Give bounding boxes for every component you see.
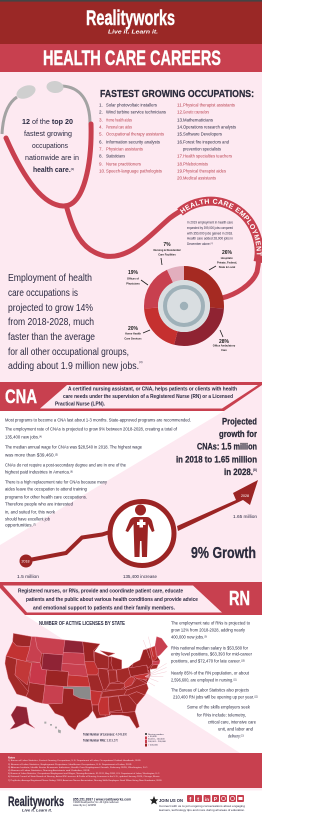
text block: CNA facts: CNAs do not require a post-secondary degree and are in one of the: [5, 462, 126, 468]
icon: star: [150, 796, 158, 804]
icons: social media: f: [189, 797, 191, 803]
list: occupations 11 to 20: Medical assistants: [183, 176, 217, 180]
text block: 12 of the top 20: 12 of the top 20: [22, 117, 73, 126]
text block: 2019 employment: (2): [211, 243, 213, 245]
logo: footer: Live it. Learn it.: [22, 808, 52, 812]
panel: notes: 5) Bureau of Labor Statistics, Occupational Employment and Wages, Nursing Assistants, 31-1131, May 2018, U.S. Department of Labor, Washington, D.C.: [8, 772, 160, 775]
list: occupations 11 to 20: 15.: [177, 132, 183, 136]
text block: CNA definition: A certified nursing assistant, or CNA, helps patients or clients with health: [68, 386, 237, 392]
legend: licenses: 100,001 - 200,000: [148, 741, 167, 743]
list: occupations 11 to 20: 12.: [177, 110, 183, 114]
legend: licenses: [145, 733, 167, 746]
list: occupations 11 to 20: Forest fire inspectors and: [183, 140, 229, 144]
icons: social media: t: [197, 797, 199, 803]
list: occupations 1 to 10: Information security analysts: [106, 140, 161, 144]
list: occupations 11 to 20: 13.: [177, 118, 183, 122]
text block: RN facts: delivery.: [228, 734, 245, 738]
logo: footer: Realityworks: [8, 793, 64, 809]
list: occupations 1 to 10: Statisticians: [106, 154, 126, 158]
list: occupations 1 to 10: Personal care aides: [106, 124, 132, 130]
list: occupations 11 to 20: Genetic counselors: [183, 110, 209, 114]
text block: CNA facts: aides leave the occupation to attend training: [5, 486, 87, 492]
chart label: 26% hospitals: [209, 250, 237, 270]
icons: social media: [187, 795, 244, 803]
list: occupations 1 to 10: Physician assistants: [106, 146, 144, 152]
list: occupations 11 to 20: [177, 102, 237, 180]
text block: RN definition: and emotional support to patients and their family members.: [33, 606, 176, 612]
chart label: 26% hospitals: Private, Federal,: [217, 260, 237, 264]
text block: 12 of the top 20: (1): [71, 167, 74, 171]
text block: contact: www.rlty.co | 123456: [73, 804, 97, 807]
heading: RN: RN: [229, 588, 250, 610]
chart labels: growth values: 135,400 increase: [123, 574, 157, 580]
list: occupations 11 to 20: 16.: [177, 140, 183, 144]
text block: RN facts: positions, and $72,470 for late career.: [171, 658, 249, 664]
list: occupations 1 to 10: 2.: [99, 110, 103, 114]
logo: [86, 7, 175, 36]
callout: projected growth for CNAs: [176, 416, 257, 478]
text block: RN facts: 2,596,600, are employed in nursing.: [171, 678, 246, 682]
text block: RN facts: unit, and labor and: [218, 726, 253, 732]
text block: license totals: [83, 732, 127, 742]
background: white diagonal behind CNA text: [0, 411, 224, 545]
text block: RN definition: [18, 588, 198, 612]
list: occupations 1 to 10: 4.: [99, 124, 103, 130]
text block: CNA facts: 135,400 new jobs.: [5, 434, 43, 440]
text block: contact: [73, 798, 132, 807]
list: occupations 11 to 20: 14.: [177, 124, 183, 130]
panel: notes: 6) National Council of State Boards of Nursing, Active RN Licenses: A Profile of Nursing Licensure in the U.S., updated January 2020, Chicago, Illinois.: [8, 775, 160, 778]
text block: CNA definition: Practical Nurse (LPN).: [55, 402, 106, 408]
chart: growth arrow line: [20, 480, 258, 568]
text block: 2019 employment: December alone.: [187, 242, 213, 246]
text block: 12 of the top 20: nationwide are in: [25, 153, 79, 162]
text block: CNA facts: [5, 418, 191, 528]
list: occupations 1 to 10: 10.: [99, 168, 105, 174]
chart labels: growth values: [17, 514, 257, 580]
panel: footer: [0, 788, 262, 816]
logo: footer: [8, 793, 64, 812]
list: occupations 11 to 20: Physical therapist aides: [183, 168, 227, 174]
text block: RN facts: entry level positions, $63,393 for mid-career: [171, 652, 252, 656]
chart label: 26% hospitals: 26%: [222, 250, 233, 256]
list: occupations 1 to 10: 3.: [99, 118, 103, 122]
text block: RN facts: RNs national median salary is $53,580 for: [171, 646, 248, 650]
RN banner: [0, 582, 262, 615]
text block: CNA facts: highest paid industries in America.: [5, 470, 76, 474]
map: active licenses by state: [5, 633, 168, 733]
list: occupations 1 to 10: 8.: [99, 154, 103, 158]
text block: employment projection: care occupations is: [8, 288, 78, 299]
text block: CNA facts: should have excellent job: [5, 516, 50, 522]
panel: notes: [0, 753, 262, 788]
chart label: 28% ambulatory: Office Ambulatory: [213, 344, 236, 348]
text block: CNA definition: [55, 386, 237, 408]
panel: notes: 7) PayScale, Average Registered Nurse Salary, 2019; American Nurses Association, Nursing Skills Employers Seek When Hiring New Graduates, 2018.: [8, 779, 162, 782]
text block: RN facts: (11): [233, 678, 237, 682]
heading: CNA: CNA: [5, 387, 37, 408]
callout: projected growth for CNAs: (8): [253, 468, 257, 472]
icons: social media: in: [205, 797, 209, 802]
chart label: 28% ambulatory: [213, 330, 236, 352]
text block: license totals: Total Number RNs: 3,919,270: [83, 738, 118, 742]
list: occupations 1 to 10: Solar photovoltaic installers: [106, 102, 158, 108]
text block: 2019 employment: expanded by 399,000 jobs compared: [187, 226, 233, 230]
text block: CNA facts: (4): [39, 434, 42, 438]
icons: social media: P: [214, 797, 218, 803]
text block: contact: ©2020 Realityworks, Inc. All rights reserved.: [73, 801, 119, 804]
text block: RN definition: patients and the public about various health conditions and provide advice: [26, 597, 198, 603]
callout: projected growth for CNAs: in 2028.: [224, 467, 253, 478]
text block: RN facts: critical care, intensive care: [208, 720, 256, 724]
icon: stethoscope: [2, 80, 259, 298]
panel: notes: 3) Altarum Institute, Health Sector Economic Indicators, Health Care Employment Growth, February 2020, Washington, D.C.: [8, 766, 148, 769]
text block: RN facts: [171, 620, 258, 738]
text block: employment projection: projected to grow 14%: [8, 303, 93, 314]
text block: license totals: Total Number of Licenses: 4,049,800: [83, 732, 127, 736]
legend: licenses: < 50,000: [148, 735, 157, 738]
text block: employment projection: for all other occupational groups,: [8, 347, 129, 358]
list: occupations 1 to 10: Wind turbine service technicians: [106, 110, 167, 114]
text block: CNA facts: The employment rate of CNAs is projected to grow 9% between 2018-2028, creating a total of: [5, 426, 178, 432]
list: occupations 11 to 20: Software Developers: [183, 132, 223, 136]
chart label: 7% nursing: [154, 242, 181, 265]
logo: Realityworks: [86, 7, 175, 30]
list: occupations 1 to 10: 7.: [99, 146, 103, 152]
chart label: 20% home health: Care Services: [124, 336, 142, 340]
list: occupations 11 to 20: Operations research analysts: [183, 124, 237, 130]
chart labels: growth values: 1.5 million: [17, 574, 39, 580]
chart label: 7% nursing: Care Facilities: [158, 252, 176, 256]
list: occupations 11 to 20: Mathematicians: [183, 118, 214, 122]
text block: CNA facts: (6): [70, 470, 73, 474]
text block: CNA facts: The median annual wage for CNAs was $28,540 in 2018. The highest wage: [5, 444, 142, 450]
text block: 12 of the top 20: fastest growing: [24, 129, 72, 138]
background: white diagonal behind RN text: [25, 615, 262, 753]
text block: 12 of the top 20: occupations: [32, 141, 68, 150]
chart label: 28% ambulatory: Care: [221, 348, 227, 352]
text block: CNA facts: (5): [55, 452, 58, 456]
list: occupations 1 to 10: [99, 102, 167, 174]
text block: CNA facts: was more than $39,460.: [5, 452, 55, 458]
list: occupations 1 to 10: 9.: [99, 162, 103, 166]
legend: licenses: Nursing number: [148, 733, 164, 736]
text block: 2019 employment: Health care added 28,000 jobs in: [187, 236, 233, 240]
panel: notes: 1) Bureau of Labor Statistics, Fastest Growing Occupations, U.S. Department of Labor, Occupational Outlook Handbook, 2019.: [8, 759, 141, 762]
chart label: 19% physicians: 19%: [128, 270, 139, 276]
list: occupations 11 to 20: Health specialties teachers: [183, 154, 233, 158]
list: occupations 1 to 10: Nurse practitioners: [106, 162, 142, 166]
list: occupations 1 to 10: Home health aides: [106, 118, 132, 122]
text block: CNA facts: in, and suited for, this work: [5, 510, 56, 514]
text block: 12 of the top 20: health care.: [33, 165, 75, 174]
chart label: 20% home health: [124, 326, 150, 340]
list: occupations 11 to 20: 17.: [177, 154, 183, 158]
text block: RN facts: (9): [204, 634, 207, 638]
list: occupations 11 to 20: 20.: [177, 176, 183, 180]
chart label: 19% physicians: Offices of: [127, 276, 139, 280]
text block: contact: 855.251.8937 | www.realityworks.com: [73, 798, 132, 802]
legend: licenses: 50,001 - 100,000: [148, 738, 165, 740]
chart label: 7% nursing: 7%: [163, 242, 171, 248]
chart label: 19% physicians: [126, 270, 148, 286]
text block: 12 of the top 20: [22, 117, 79, 174]
panel: notes: 2) Bureau of Labor Statistics, Employment Projections: Healthcare Occupations, U.S. Department of Labor, 2019.: [8, 763, 132, 766]
text block: RN facts: Some of the skills employers seek: [187, 704, 251, 710]
list: occupations 1 to 10: 1.: [99, 102, 103, 108]
panel: notes: 4) Bureau of Labor Statistics, Nursing Assistants and Orderlies, 2019.: [8, 769, 90, 772]
chart label: 7% nursing: Nursing & Residential: [154, 248, 181, 252]
text block: employment projection: from 2018-2028, much: [8, 317, 94, 328]
chart label: 26% hospitals: Hospitals:: [221, 256, 233, 260]
text block: RN facts: for RNs include: telemetry,: [197, 712, 246, 718]
text block: RN facts: grow 12% from 2018-2028, adding nearly: [171, 628, 246, 632]
list: occupations 1 to 10: Speech-language pathologists: [106, 168, 163, 174]
list: occupations 1 to 10: 6.: [99, 140, 103, 144]
text block: RN facts: 400,000 new jobs.: [171, 634, 209, 640]
legend: licenses: > 200,000: [148, 744, 159, 746]
list: occupations 11 to 20: Physical therapist assistants: [183, 102, 236, 108]
heading: health care employment on tube: HEALTH CARE EMPLOYMENT: [180, 198, 262, 256]
heading: join us on: JOIN US ON: [159, 798, 183, 803]
text block: 2019 employment: [187, 220, 233, 246]
chart label: 26% hospitals: State & Local: [219, 265, 235, 269]
text block: employment projection: Employment of health: [8, 273, 92, 284]
text block: RN facts: (12): [254, 694, 258, 698]
text block: connect: [159, 804, 245, 812]
text block: CNA facts: opportunities.: [5, 522, 33, 528]
list: occupations 1 to 10: 5.: [99, 132, 103, 136]
list: occupations 1 to 10: Occupational therapy assistants: [106, 132, 165, 136]
list: occupations 11 to 20: Phlebotomists: [183, 162, 209, 166]
list: occupations 11 to 20: prevention specialists: [183, 146, 222, 152]
text block: RN facts: The Bureau of Labor Statistics also projects: [171, 688, 250, 692]
text block: CNA facts: Therefore people who are interested: [5, 502, 73, 506]
chart labels: growth values: 1.65 million: [233, 514, 257, 520]
text block: RN facts: (13): [241, 734, 244, 738]
list: occupations 11 to 20: 11.: [177, 102, 183, 108]
title: [0, 44, 262, 72]
text block: CNA definition: care needs under the supervision of a Registered Nurse (RN) or a Licensed: [63, 394, 233, 400]
text block: RN facts: The employment rate of RNs is projected to: [171, 620, 250, 626]
text block: RN facts: Nearly 85% of the RN population, or about: [171, 670, 250, 676]
list: occupations 11 to 20: 18.: [177, 162, 183, 166]
text block: connect: learners, technology tips and more during all areas of education.: [159, 808, 245, 812]
chart label: 28% ambulatory: 28%: [219, 339, 230, 345]
text block: employment projection: [8, 273, 143, 372]
chart: employment donut: [151, 273, 217, 339]
chart label: 19% physicians: Physicians: [126, 282, 140, 286]
chart label: 20% home health: 20%: [128, 326, 139, 332]
chart: growth arrow line: 2018: [22, 560, 30, 564]
CNA banner: [0, 382, 262, 411]
chart: growth arrow line: 2028: [241, 494, 249, 498]
header band: [0, 0, 262, 44]
text block: 2019 employment: In 2019 employment in health care: [187, 220, 233, 224]
list: occupations 11 to 20: 19.: [177, 168, 183, 174]
text block: employment projection: (3): [139, 360, 143, 364]
logo: Live it. Learn it.: [108, 30, 159, 36]
text block: employment projection: faster than the average: [8, 332, 95, 343]
heading: number of active licenses: NUMBER OF ACTIVE LICENSES BY STATE: [39, 621, 125, 627]
text block: RN facts: (10): [241, 658, 245, 662]
text block: RN definition: Registered nurses, or RNs, provide and coordinate patient care, educate: [18, 588, 183, 594]
text block: connect: Connect with us to join ongoing conversations about engaging: [159, 804, 245, 808]
text block: employment projection: adding about 1.9 million new jobs.: [8, 361, 139, 372]
icon: nurse in circle: [110, 502, 174, 566]
text block: CNA facts: programs for other health care occupations.: [5, 494, 87, 500]
panel: notes: Notes: [8, 756, 15, 760]
text block: CNA facts: (7): [33, 522, 36, 526]
text block: CNA facts: Most programs to become a CNA last about 1-3 months. State-approved programs are recommended.: [5, 418, 191, 422]
text block: 2019 employment: with 350,000 jobs gained in 2018.: [187, 232, 233, 236]
chart label: 20% home health: Home Health: [125, 332, 141, 336]
text block: CNA facts: There is a high replacement rate for CNAs because many: [5, 480, 108, 484]
